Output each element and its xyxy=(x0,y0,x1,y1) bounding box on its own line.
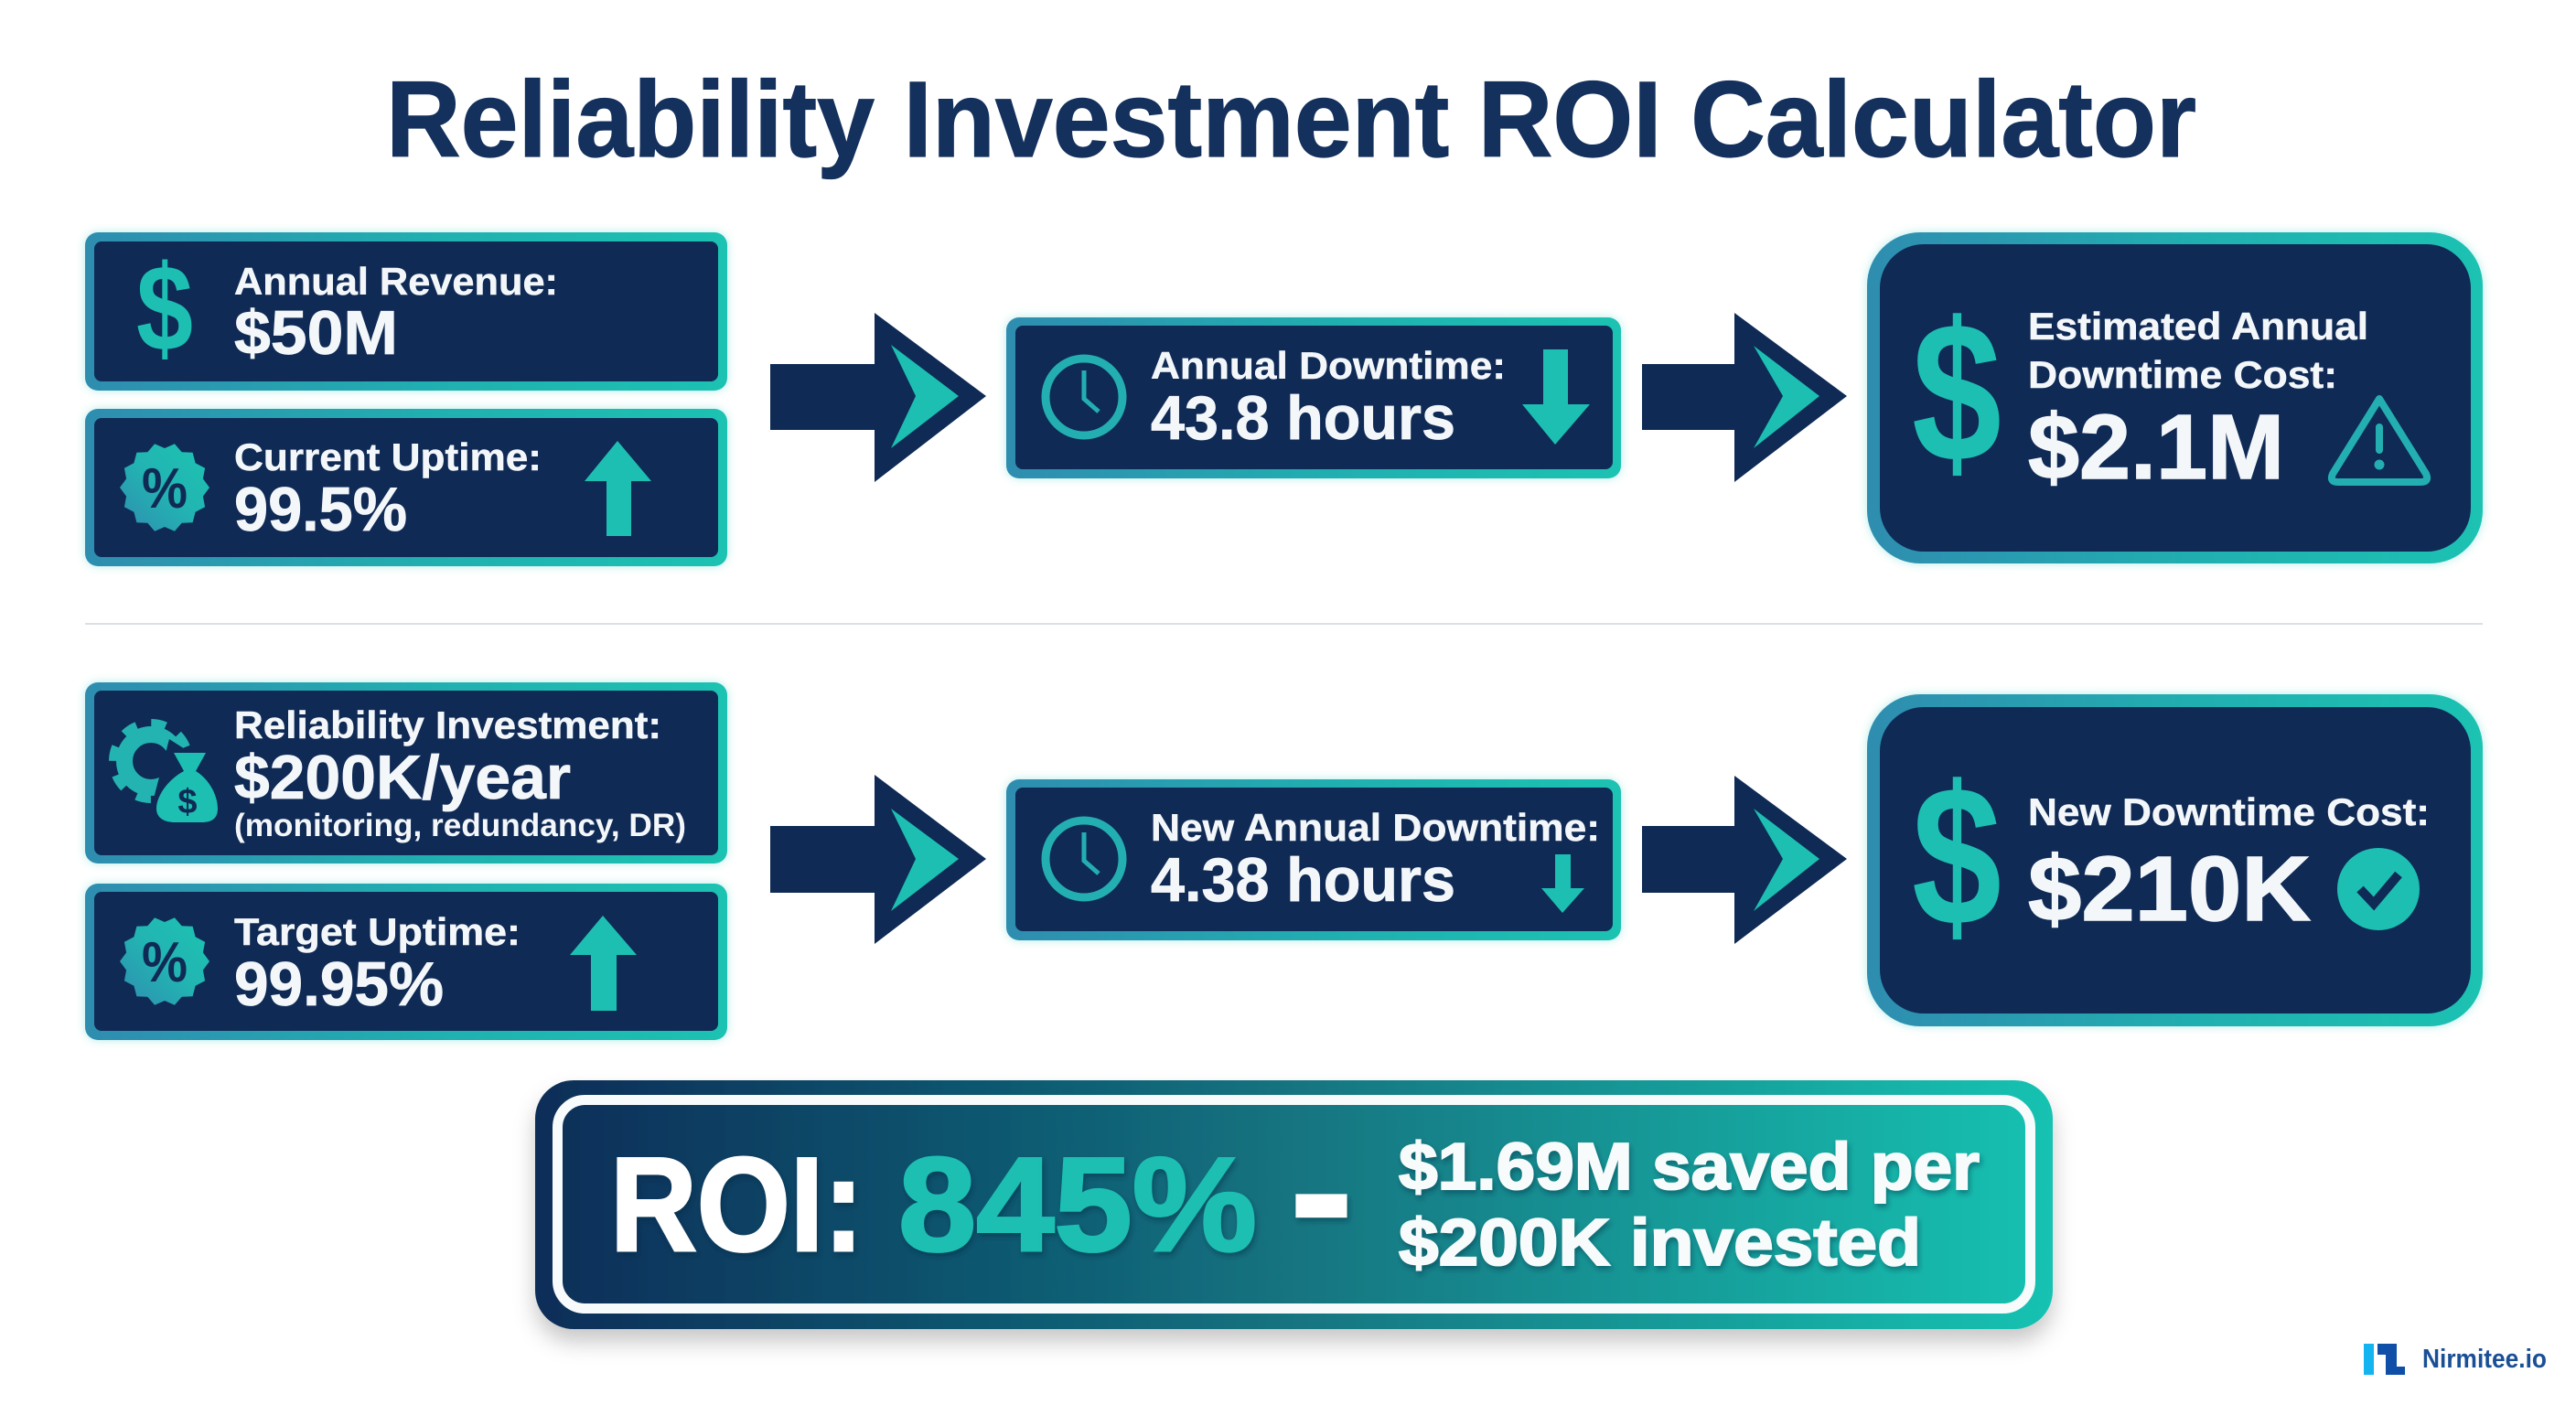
text: savings statement xyxy=(1399,1131,1980,1280)
icon: clock xyxy=(1046,820,1122,897)
icon: percent badge: % xyxy=(142,931,188,994)
panel: estimated annual downtime cost xyxy=(1867,232,2483,563)
value: ROI label: ROI: xyxy=(610,1130,864,1279)
label: current uptime: Current Uptime: xyxy=(234,435,542,478)
icon: gear and money bag: $ xyxy=(177,783,198,821)
value: 845%: 845% xyxy=(898,1130,1257,1279)
panel: current uptime xyxy=(85,409,727,566)
logo: Nirmitee.io xyxy=(2364,1344,2547,1375)
panel: new downtime cost xyxy=(1867,694,2483,1026)
label: annual downtime: Annual Downtime: xyxy=(1151,344,1506,387)
value: 43.8 hours: 43.8 hours xyxy=(1151,383,1455,453)
icon: large dollar: $ xyxy=(1912,282,2002,504)
value: $50M: $50M xyxy=(234,298,398,368)
label: estimated annual downtime cost: Downtime Cost: xyxy=(2028,353,2337,396)
value: 4.38 hours: 4.38 hours xyxy=(1151,845,1455,915)
panel: new annual downtime xyxy=(1006,779,1621,940)
value: $210K: $210K xyxy=(2028,838,2311,940)
label: target uptime: Target Uptime: xyxy=(234,910,521,953)
icon: up arrow xyxy=(570,916,637,1011)
icon: clock xyxy=(1046,359,1122,435)
note: monitoring, redundancy, DR: (monitoring, redundancy, DR) xyxy=(234,808,686,843)
arrow: downtime to cost xyxy=(1642,313,1847,482)
value: 99.5%: 99.5% xyxy=(234,475,407,544)
icon: percent badge: % xyxy=(142,457,188,520)
value: $2.1M: $2.1M xyxy=(2028,396,2284,499)
arrow: investment to new downtime xyxy=(770,775,986,944)
icon: down arrow xyxy=(1541,854,1584,913)
arrow: inputs to downtime xyxy=(770,313,986,482)
label: reliability investment: Reliability Investment: xyxy=(234,703,661,746)
icon: large dollar: $ xyxy=(1912,745,2002,968)
panel: annual revenue xyxy=(85,232,727,391)
label: estimated annual downtime cost: Estimated Annual xyxy=(2028,305,2368,348)
label: new annual downtime: New Annual Downtime: xyxy=(1151,806,1600,849)
panel: target uptime xyxy=(85,884,727,1040)
icon: down arrow xyxy=(1522,349,1590,445)
label: estimated annual downtime cost xyxy=(2028,305,2368,396)
icon: up arrow xyxy=(585,441,651,536)
logo: Nirmitee.io: Nirmitee.io xyxy=(2422,1345,2547,1374)
arrow: new downtime to new cost xyxy=(1642,776,1847,944)
icon: percent badge xyxy=(120,917,209,1005)
icon: warning triangle xyxy=(2332,399,2427,482)
icon: check circle xyxy=(2337,848,2420,930)
value: 99.95%: 99.95% xyxy=(234,949,444,1019)
text: savings statement: $200K invested xyxy=(1399,1207,1921,1280)
label: annual revenue: Annual Revenue: xyxy=(234,260,558,303)
title: Reliability Investment ROI Calculator xyxy=(386,59,2196,180)
panel: reliability investment xyxy=(85,682,727,863)
callout: ROI banner xyxy=(535,1056,2053,1329)
icon: gear and money bag xyxy=(113,724,218,828)
label: new downtime cost: New Downtime Cost: xyxy=(2028,790,2430,833)
callout: ROI banner: – xyxy=(1293,1056,1350,1321)
icon: percent badge xyxy=(120,444,209,531)
text: savings statement: $1.69M saved per xyxy=(1399,1131,1980,1204)
panel: annual downtime xyxy=(1006,317,1621,478)
divider xyxy=(85,623,2483,625)
icon: dollar: $ xyxy=(136,241,193,377)
value: $200K/year: $200K/year xyxy=(234,743,571,812)
